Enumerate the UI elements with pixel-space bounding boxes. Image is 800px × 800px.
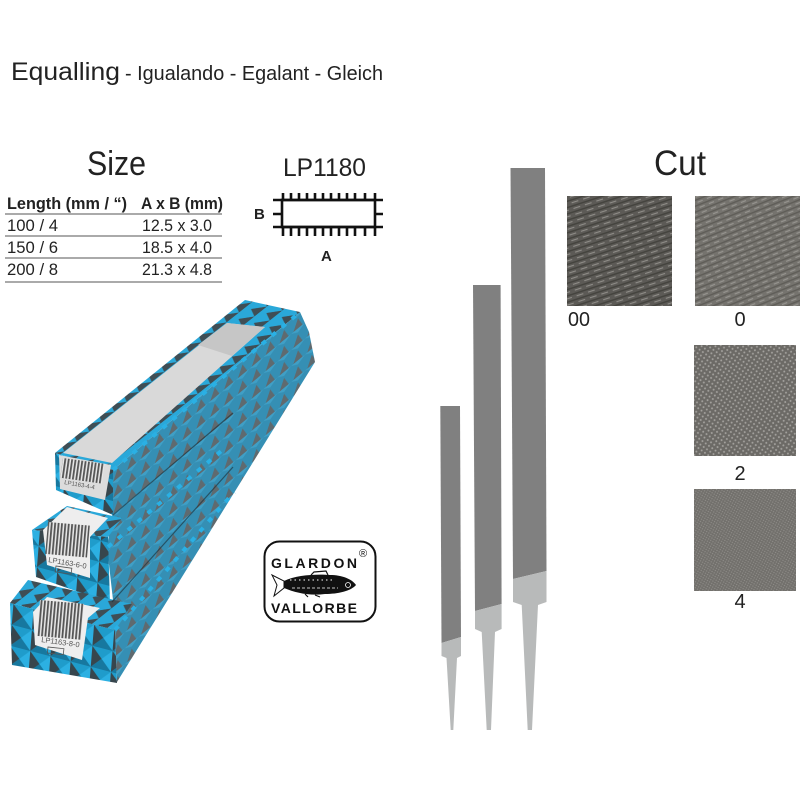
icon: trout	[272, 571, 356, 597]
product boxes	[10, 300, 315, 683]
title: Equalling	[11, 58, 120, 86]
cross-section diagram: A	[321, 248, 332, 265]
box 2 front	[32, 530, 110, 603]
product boxes: LP1163-4-4	[64, 480, 96, 491]
cut swatch 2	[694, 345, 796, 485]
title: - Igualando - Egalant - Gleich	[125, 63, 383, 85]
cut swatch 00: 00	[568, 309, 590, 331]
size table: 150 / 6	[7, 239, 58, 257]
cut swatch 4: 4	[734, 591, 746, 613]
cut swatch 4	[694, 489, 796, 613]
heading: cut: Cut	[654, 144, 706, 183]
box 1 label	[63, 323, 265, 463]
size table: A x B (mm)	[141, 195, 223, 213]
model label: LP1180	[283, 154, 366, 182]
logo: Glardon Vallorbe: GLARDON	[271, 555, 357, 571]
box 3 front	[10, 603, 117, 683]
cut swatch 2: 2	[734, 463, 746, 485]
logo: Glardon Vallorbe: VALLORBE	[271, 600, 357, 616]
size table: 21.3 x 4.8	[142, 261, 212, 279]
title	[11, 58, 383, 86]
cut swatch 00	[567, 196, 672, 331]
box 1 top	[55, 300, 300, 470]
size table: 12.5 x 3.0	[142, 217, 212, 235]
heading: size: Size	[87, 145, 146, 183]
cross-section diagram: B	[254, 206, 265, 223]
box seams and bright edges	[108, 312, 300, 630]
size table: 100 / 4	[7, 217, 58, 235]
file: 200 mm	[510, 168, 546, 730]
box 1 front	[55, 453, 113, 515]
box side panels	[107, 312, 315, 682]
size table	[5, 195, 223, 282]
logo: Glardon Vallorbe	[264, 542, 376, 622]
box 3 label	[33, 597, 100, 660]
size table: Length (mm / “)	[7, 195, 127, 213]
box 2 label	[43, 507, 108, 578]
cut swatch 0: 0	[734, 309, 746, 331]
file: 150 mm	[473, 285, 502, 730]
logo: Glardon Vallorbe: ®	[359, 548, 367, 560]
cross-section diagram	[254, 193, 383, 265]
size table: 200 / 8	[7, 261, 58, 279]
box 2 top	[32, 506, 122, 537]
product boxes: LP1163-6-0	[48, 555, 87, 571]
product boxes: LP1163-8-0	[41, 635, 80, 649]
cut swatch 0	[695, 196, 800, 331]
file: 100 mm	[440, 406, 461, 730]
size table: 18.5 x 4.0	[142, 239, 212, 257]
box 3 top	[10, 580, 132, 630]
